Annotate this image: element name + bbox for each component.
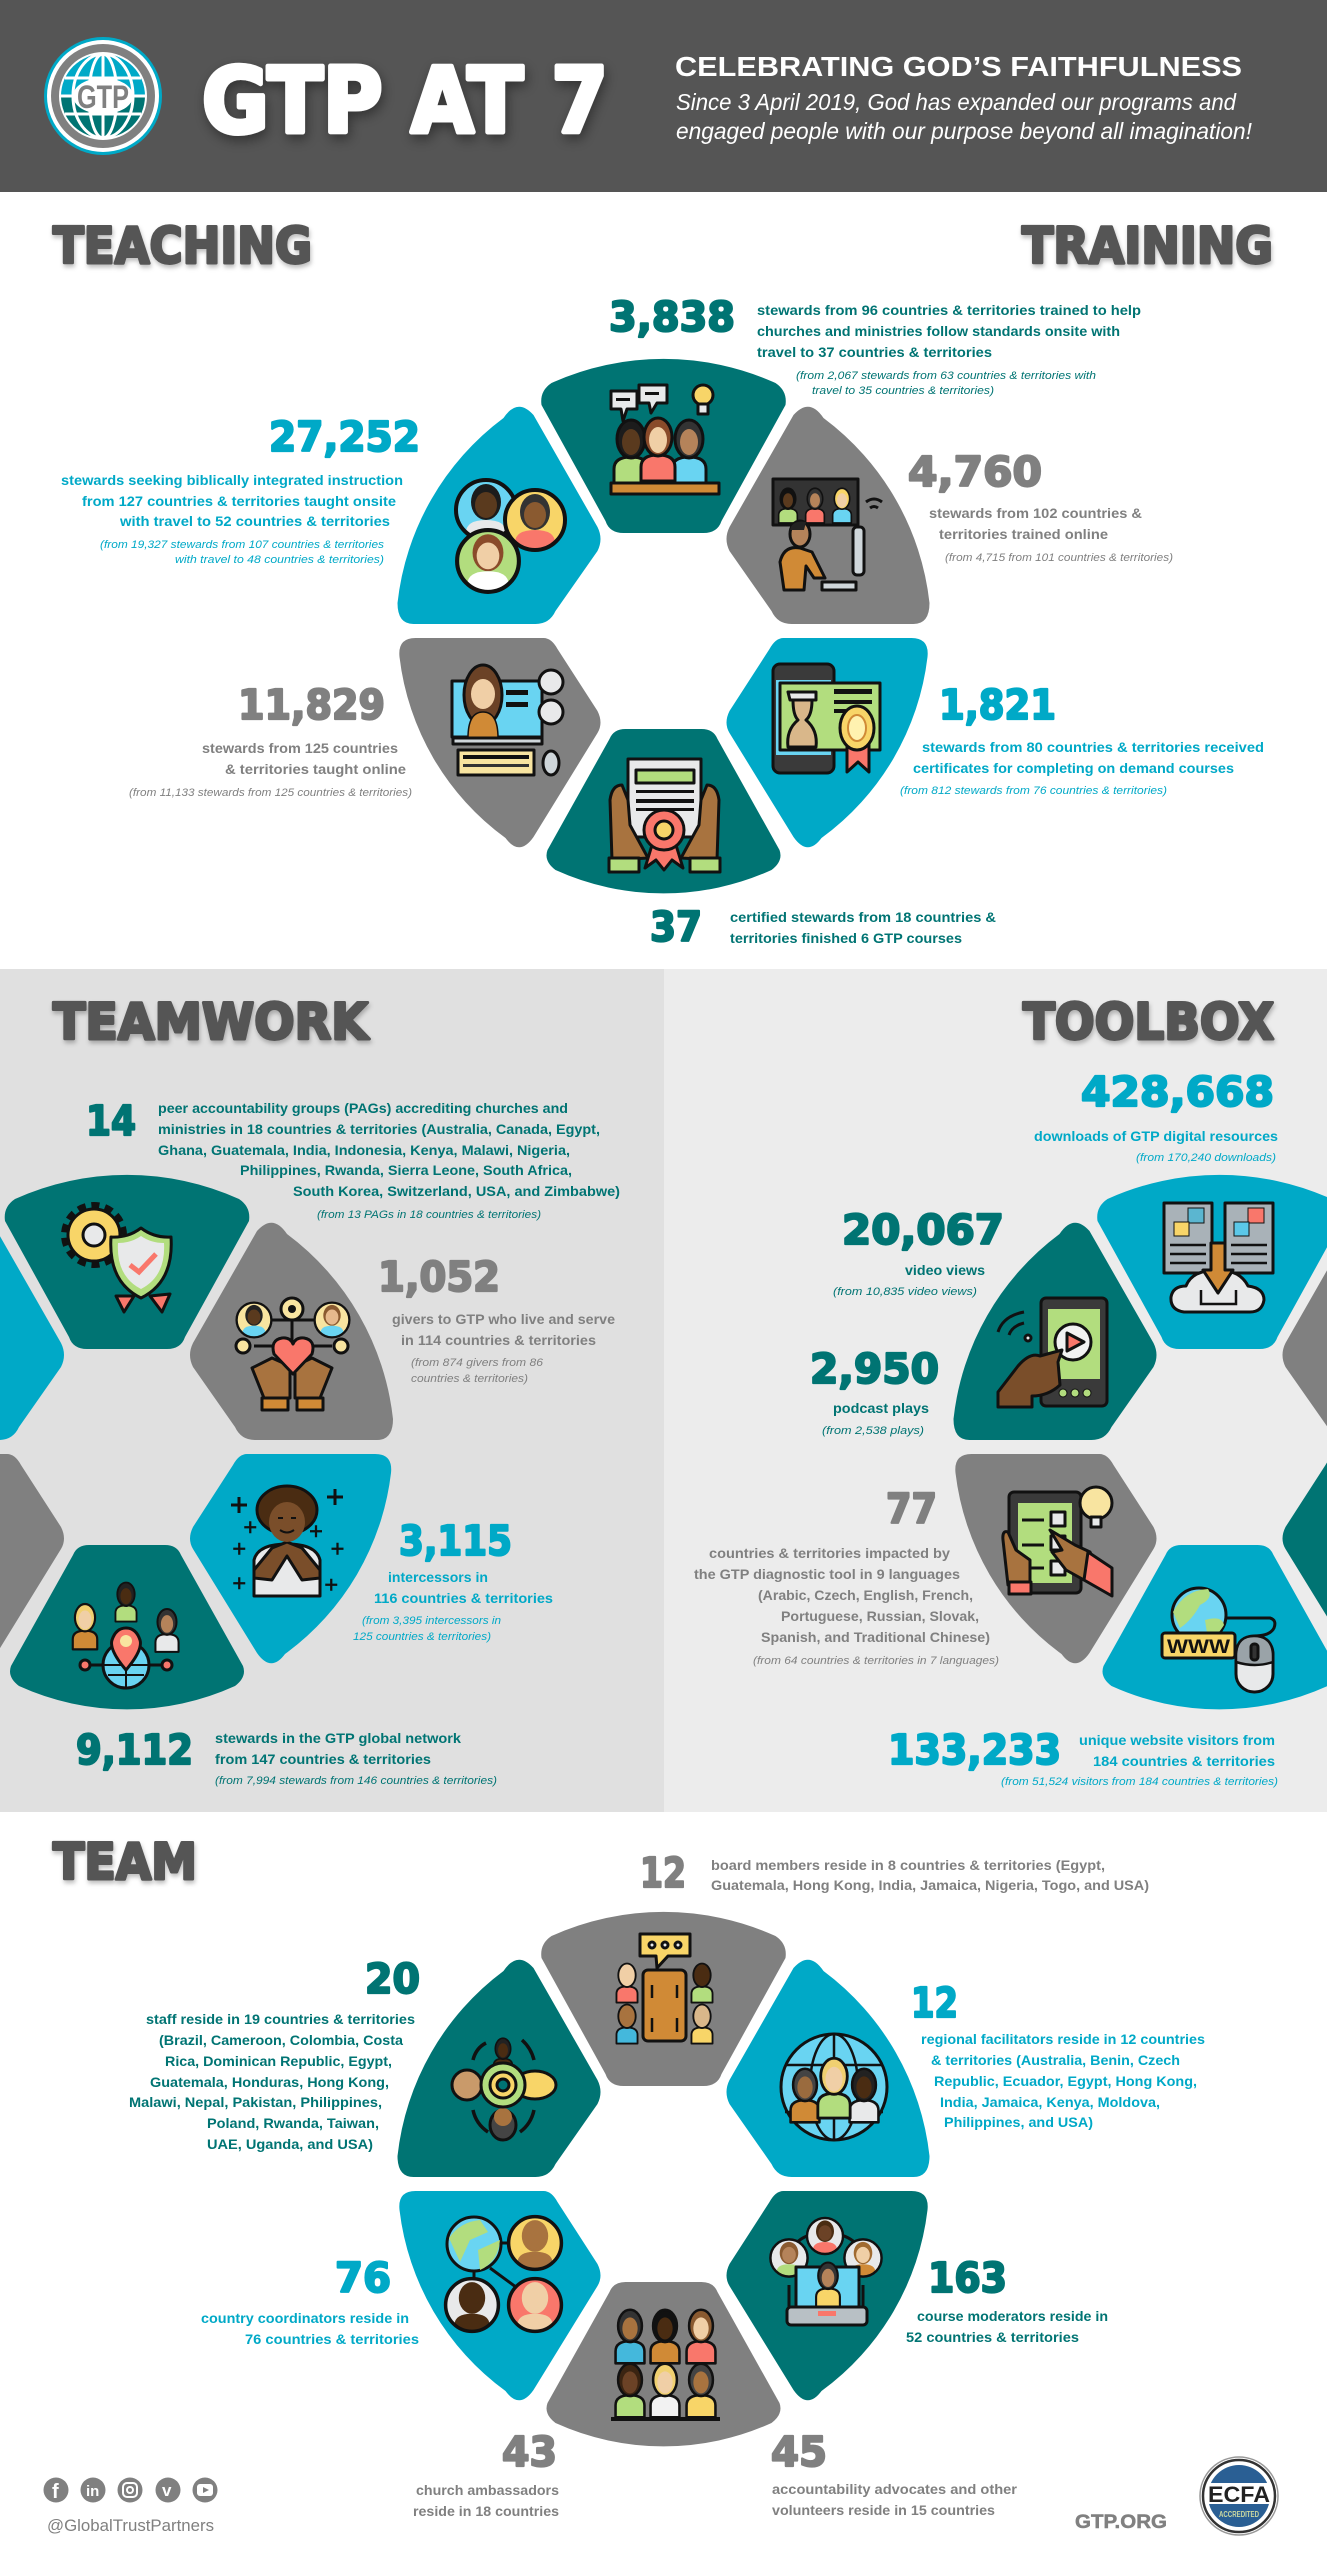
panel: teamwork ring bbox=[0, 1175, 393, 1709]
stat: 45 accountability advocates bbox=[771, 2428, 1018, 2518]
description: Spanish, and Traditional Chinese) bbox=[761, 1629, 990, 1645]
description: Portuguese, Russian, Slovak, bbox=[781, 1608, 979, 1624]
description: the GTP diagnostic tool in 9 languages bbox=[694, 1566, 960, 1582]
description: India, Jamaica, Kenya, Moldova, bbox=[940, 2094, 1160, 2110]
description: certificates for completing on demand courses bbox=[913, 760, 1234, 776]
petal: diagnostic tool bbox=[955, 1454, 1156, 1663]
social media icons: in bbox=[86, 2483, 99, 2500]
stat: 163 course moderators bbox=[906, 2254, 1108, 2345]
description bbox=[906, 2308, 1108, 2345]
description: & territories (Australia, Benin, Czech bbox=[931, 2052, 1180, 2068]
icon: GTP globe logo: GTP bbox=[77, 79, 129, 115]
number: 11,829 bbox=[238, 681, 385, 729]
number: 45 bbox=[771, 2428, 827, 2476]
stat: 3,115 intercessors bbox=[353, 1517, 553, 1643]
petal: onsite training bbox=[541, 359, 786, 533]
stat: 77 diagnostic tool bbox=[694, 1485, 999, 1667]
stat: 4,760 trained online bbox=[908, 448, 1173, 564]
description: ministries in 18 countries & territories (Australia, Canada, Egypt, bbox=[158, 1121, 600, 1137]
description: countries & territories) bbox=[411, 1373, 528, 1385]
number: 3,115 bbox=[399, 1517, 512, 1565]
icon: connected coordinators bbox=[446, 2217, 561, 2332]
description: Republic, Ecuador, Egypt, Hong Kong, bbox=[934, 2073, 1197, 2089]
petal: onsite teaching bbox=[398, 407, 600, 624]
description bbox=[730, 909, 996, 946]
description: (Arabic, Czech, English, French, bbox=[758, 1587, 973, 1603]
header banner bbox=[0, 0, 1327, 192]
heading: training: TRAINING bbox=[1022, 217, 1273, 275]
description: Guatemala, Honduras, Hong Kong, bbox=[150, 2074, 389, 2090]
number: 4,760 bbox=[908, 448, 1042, 496]
icon: website globe and mouse: WWW bbox=[1167, 1637, 1230, 1658]
number: 1,821 bbox=[939, 681, 1056, 729]
description: with travel to 48 countries & territories) bbox=[175, 554, 384, 566]
number: 3,838 bbox=[609, 293, 735, 341]
petal: right gray bbox=[1282, 1223, 1327, 1440]
icon: ECFA accredited badge: ECFA bbox=[1208, 2482, 1270, 2507]
social media icons: f bbox=[52, 2481, 59, 2503]
stat: 3,838 trained onsite bbox=[609, 293, 1141, 397]
description bbox=[129, 740, 412, 799]
icon: gear and shield bbox=[68, 1209, 171, 1312]
petal: intercessors bbox=[190, 1454, 391, 1663]
petal: certified stewards bbox=[546, 729, 780, 893]
description: 125 countries & territories) bbox=[353, 1631, 491, 1643]
number: 2,950 bbox=[810, 1345, 939, 1393]
description: (from 19,327 stewards from 107 countries & territories bbox=[100, 539, 385, 551]
panel: teamwork background bbox=[0, 969, 664, 1812]
description bbox=[1001, 1732, 1278, 1788]
description: regional facilitators reside in 12 countries bbox=[921, 2031, 1205, 2047]
description bbox=[929, 505, 1173, 564]
petal: left gray bbox=[0, 1454, 64, 1663]
description: Guatemala, Hong Kong, India, Jamaica, Nigeria, Togo, and USA) bbox=[711, 1877, 1149, 1893]
description: 52 countries & territories bbox=[906, 2329, 1079, 2345]
tagline: Since 3 April 2019, God has expanded our programs and bbox=[676, 89, 1237, 115]
description bbox=[353, 1569, 553, 1643]
petal: website visitors bbox=[1102, 1545, 1327, 1709]
icon: website globe and mouse bbox=[1162, 1588, 1275, 1692]
description: volunteers reside in 15 countries bbox=[772, 2502, 995, 2518]
description bbox=[201, 2310, 419, 2347]
description: video views bbox=[905, 1262, 985, 1278]
stat: 12 regional facilitators bbox=[911, 1979, 1205, 2130]
social media icons: v bbox=[162, 2481, 172, 2500]
stat: 76 country coordinators bbox=[201, 2254, 419, 2347]
description: peer accountability groups (PAGs) accrediting churches and bbox=[158, 1100, 568, 1116]
icon: GTP globe logo bbox=[44, 37, 162, 155]
description: (from 13 PAGs in 18 countries & territories) bbox=[317, 1209, 541, 1221]
number: 12 bbox=[640, 1849, 686, 1897]
number: 14 bbox=[86, 1097, 136, 1145]
description: (from 11,133 stewards from 125 countries & territories) bbox=[129, 787, 412, 799]
description: intercessors in bbox=[388, 1569, 488, 1585]
description: churches and ministries follow standards onsite with bbox=[757, 323, 1120, 339]
stat: 9,112 global network bbox=[76, 1726, 497, 1787]
description: from 127 countries & territories taught onsite bbox=[82, 493, 396, 509]
description bbox=[772, 2481, 1018, 2518]
petal: online training bbox=[726, 407, 930, 624]
icon: person praying bbox=[231, 1486, 344, 1596]
petal: regional facilitators bbox=[726, 1960, 930, 2177]
number: 1,052 bbox=[378, 1253, 500, 1301]
description: Malawi, Nepal, Pakistan, Philippines, bbox=[129, 2094, 382, 2110]
icon: ECFA accredited badge bbox=[1200, 2457, 1278, 2535]
petal: ambassadors and advocates bbox=[546, 2282, 780, 2446]
description: unique website visitors from bbox=[1079, 1732, 1275, 1748]
description bbox=[215, 1730, 497, 1787]
panel: teaching and training ring bbox=[398, 359, 930, 893]
stat: 1,821 certificates bbox=[900, 681, 1264, 797]
description: downloads of GTP digital resources bbox=[1034, 1128, 1278, 1144]
stat: 428,668 downloads bbox=[1034, 1068, 1278, 1164]
petal: left blue bbox=[0, 1223, 64, 1440]
description: Philippines, Rwanda, Sierra Leone, South Africa, bbox=[240, 1162, 572, 1178]
petal: certificates bbox=[726, 638, 928, 847]
number: 37 bbox=[650, 903, 702, 951]
description: 76 countries & territories bbox=[245, 2331, 419, 2347]
description: givers to GTP who live and serve bbox=[392, 1311, 615, 1327]
description bbox=[833, 1262, 985, 1298]
description: (from 170,240 downloads) bbox=[1136, 1152, 1276, 1164]
description: from 147 countries & territories bbox=[215, 1751, 431, 1767]
icon: onsite training group bbox=[611, 385, 719, 494]
stat: 20 staff bbox=[129, 1955, 420, 2152]
description: stewards in the GTP global network bbox=[215, 1730, 461, 1746]
description: (Brazil, Cameroon, Colombia, Costa bbox=[159, 2032, 403, 2048]
stat: 1,052 givers bbox=[378, 1253, 615, 1385]
petal: video and podcast bbox=[954, 1223, 1156, 1440]
description: (from 10,835 video views) bbox=[833, 1286, 977, 1298]
description: (from 812 stewards from 76 countries & territories) bbox=[900, 785, 1167, 797]
description: Rica, Dominican Republic, Egypt, bbox=[165, 2053, 392, 2069]
description bbox=[413, 2482, 559, 2519]
icon: globe with facilitators bbox=[781, 2034, 887, 2140]
description: South Korea, Switzerland, USA, and Zimbabwe) bbox=[293, 1183, 620, 1199]
description: territories trained online bbox=[939, 526, 1108, 542]
number: 9,112 bbox=[76, 1726, 193, 1774]
stat: 20,067 video views bbox=[833, 1206, 1004, 1298]
description: UAE, Uganda, and USA) bbox=[207, 2136, 373, 2152]
icon: hands holding certificate bbox=[609, 759, 720, 872]
description: (from 3,395 intercessors in bbox=[362, 1615, 501, 1627]
icon: three avatars bbox=[456, 480, 565, 593]
description: accountability advocates and other bbox=[772, 2481, 1018, 2497]
description bbox=[921, 2031, 1205, 2130]
heading: teaching: TEACHING bbox=[53, 217, 312, 275]
subtitle: CELEBRATING GOD’S FAITHFULNESS bbox=[675, 51, 1242, 82]
title: GTP AT 7 bbox=[202, 49, 608, 154]
description: podcast plays bbox=[833, 1400, 929, 1416]
tagline bbox=[676, 89, 1253, 144]
tagline: engaged people with our purpose beyond all imagination! bbox=[676, 118, 1253, 144]
description bbox=[158, 1100, 620, 1221]
description: Philippines, and USA) bbox=[944, 2114, 1093, 2130]
description: & territories taught online bbox=[225, 761, 406, 777]
stat: 11,829 taught online bbox=[129, 681, 412, 799]
stat: 37 certified stewards bbox=[650, 903, 996, 951]
description: stewards from 102 countries & bbox=[929, 505, 1142, 521]
description: (from 2,067 stewards from 63 countries & territories with bbox=[796, 370, 1096, 382]
icon: online teaching monitor bbox=[452, 665, 563, 775]
description: stewards from 125 countries bbox=[202, 740, 398, 756]
description: (from 4,715 from 101 countries & territories) bbox=[945, 552, 1173, 564]
description: territories finished 6 GTP courses bbox=[730, 930, 962, 946]
petal: global network bbox=[10, 1545, 244, 1709]
petal: staff bbox=[398, 1960, 600, 2177]
description: stewards seeking biblically integrated instruction bbox=[61, 472, 403, 488]
number: 27,252 bbox=[269, 413, 420, 461]
petal: online teaching bbox=[399, 638, 600, 847]
icon: teamwork gear bbox=[452, 2038, 556, 2140]
panel: toolbox background bbox=[664, 969, 1327, 1812]
description: (from 2,538 plays) bbox=[822, 1425, 924, 1437]
icon: downloading documents bbox=[1164, 1203, 1273, 1312]
description bbox=[711, 1857, 1149, 1893]
description: staff reside in 19 countries & territories bbox=[146, 2011, 415, 2027]
icon: tablet video bbox=[998, 1298, 1107, 1407]
icon: phone certificate bbox=[773, 664, 880, 773]
description: 116 countries & territories bbox=[374, 1590, 553, 1606]
number: 20 bbox=[365, 1955, 420, 2003]
description: course moderators reside in bbox=[917, 2308, 1108, 2324]
description bbox=[129, 2011, 415, 2152]
stat: 12 board members bbox=[640, 1849, 1149, 1897]
panel: team ring bbox=[398, 1912, 930, 2446]
petal: right teal bbox=[1282, 1454, 1327, 1663]
description: stewards from 80 countries & territories received bbox=[922, 739, 1264, 755]
description: (from 7,994 stewards from 146 countries & territories) bbox=[215, 1775, 497, 1787]
petal: course moderators bbox=[726, 2191, 928, 2400]
panel: toolbox ring bbox=[954, 1175, 1327, 1709]
stat: 14 peer accountability groups bbox=[86, 1097, 620, 1221]
website: GTP.ORG bbox=[1075, 2512, 1167, 2533]
number: 77 bbox=[886, 1485, 937, 1533]
description: travel to 37 countries & territories bbox=[757, 344, 992, 360]
description: country coordinators reside in bbox=[201, 2310, 409, 2326]
icon: people network bbox=[73, 1582, 179, 1688]
description bbox=[392, 1311, 615, 1385]
heading: teamwork: TEAMWORK bbox=[53, 993, 370, 1051]
number: 133,233 bbox=[888, 1726, 1061, 1774]
petal: givers bbox=[190, 1223, 393, 1440]
heading: team: TEAM bbox=[53, 1833, 197, 1891]
description: 184 countries & territories bbox=[1093, 1753, 1275, 1769]
icon: giving hands bbox=[236, 1298, 349, 1410]
description: certified stewards from 18 countries & bbox=[730, 909, 996, 925]
icon: group of ambassadors bbox=[611, 2310, 720, 2421]
description bbox=[900, 739, 1264, 797]
petal: downloads bbox=[1097, 1175, 1327, 1349]
stat: 43 church ambassadors bbox=[413, 2428, 559, 2519]
description bbox=[757, 302, 1141, 397]
description: board members reside in 8 countries & territories (Egypt, bbox=[711, 1857, 1105, 1873]
description: in 114 countries & territories bbox=[401, 1332, 596, 1348]
description: travel to 35 countries & territories) bbox=[812, 385, 994, 397]
heading: toolbox: TOOLBOX bbox=[1023, 993, 1274, 1051]
description: Ghana, Guatemala, India, Indonesia, Kenya, Malawi, Nigeria, bbox=[158, 1142, 570, 1158]
description: with travel to 52 countries & territories bbox=[119, 513, 390, 529]
description bbox=[694, 1545, 999, 1667]
social media icons bbox=[44, 2478, 218, 2503]
stat: 2,950 podcast plays bbox=[810, 1345, 939, 1437]
description bbox=[61, 472, 403, 566]
icon: ECFA accredited badge: ACCREDITED bbox=[1219, 2510, 1259, 2519]
social handle: @GlobalTrustPartners bbox=[47, 2516, 214, 2535]
number: 76 bbox=[335, 2254, 391, 2302]
icon: online training bbox=[773, 479, 882, 590]
description: reside in 18 countries bbox=[413, 2503, 559, 2519]
icon: diagnostic tablet bbox=[1003, 1487, 1112, 1596]
number: 43 bbox=[502, 2428, 557, 2476]
description bbox=[1034, 1128, 1278, 1164]
icon: board meeting bbox=[616, 1934, 713, 2044]
description bbox=[822, 1400, 929, 1437]
description: church ambassadors bbox=[416, 2482, 559, 2498]
number: 428,668 bbox=[1081, 1068, 1274, 1116]
description: (from 64 countries & territories in 7 languages) bbox=[753, 1655, 999, 1667]
petal: accountability groups bbox=[5, 1175, 249, 1349]
description: stewards from 96 countries & territories trained to help bbox=[757, 302, 1141, 318]
petal: country coordinators bbox=[399, 2191, 600, 2400]
description: Poland, Rwanda, Taiwan, bbox=[207, 2115, 379, 2131]
number: 12 bbox=[911, 1979, 958, 2027]
description: (from 874 givers from 86 bbox=[411, 1357, 544, 1369]
number: 20,067 bbox=[842, 1206, 1004, 1254]
stat: 27,252 taught onsite bbox=[61, 413, 420, 566]
number: 163 bbox=[928, 2254, 1007, 2302]
description: (from 51,524 visitors from 184 countries & territories) bbox=[1001, 1776, 1278, 1788]
icon: online moderators bbox=[770, 2218, 882, 2325]
petal: board members bbox=[541, 1912, 786, 2086]
description: countries & territories impacted by bbox=[709, 1545, 950, 1561]
stat: 133,233 website visitors bbox=[888, 1726, 1278, 1788]
